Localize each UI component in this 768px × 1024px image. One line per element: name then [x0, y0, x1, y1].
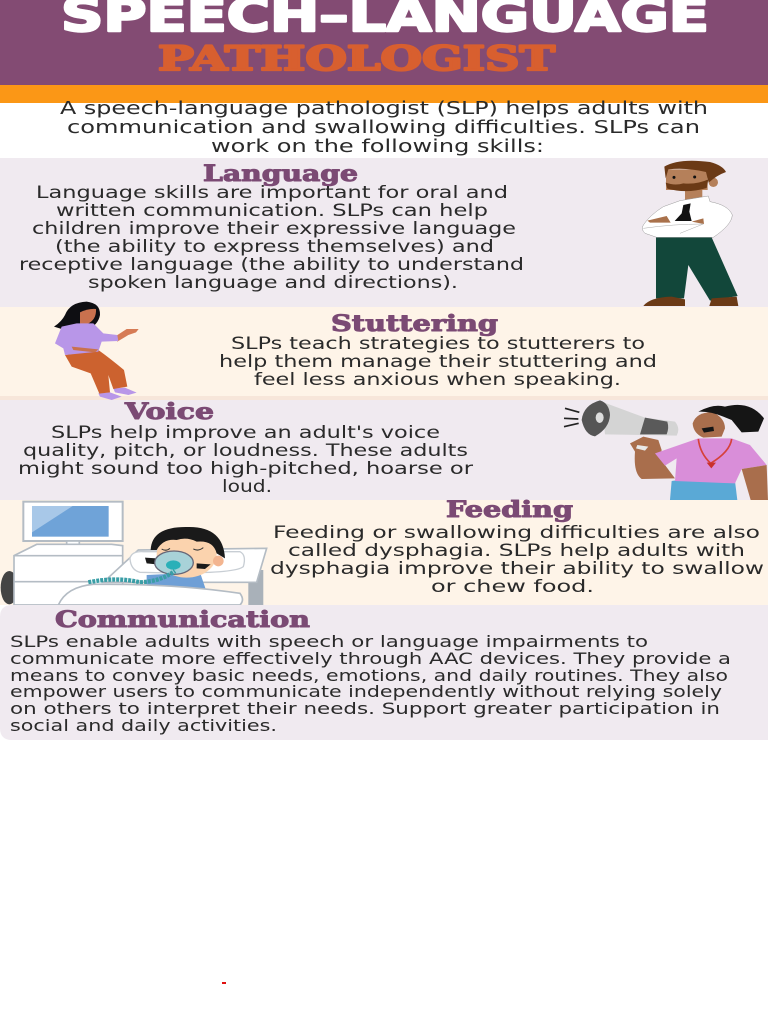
intro text: A speech-language pathologist (SLP) helps adults with: [60, 99, 708, 119]
voice body text: [18, 423, 473, 496]
panel: communication: [0, 605, 768, 740]
stuttering body text: [219, 334, 657, 389]
feeding body text: Feeding or swallowing difficulties are also: [273, 523, 760, 542]
heading: communication: Communication: [55, 607, 310, 633]
icon: seated woman: [54, 302, 139, 400]
communication body text: SLPs enable adults with speech or language impairments to: [10, 632, 648, 651]
feeding body text: dysphagia improve their ability to swallow: [270, 559, 764, 578]
panel: language: [0, 158, 768, 307]
language body text: spoken language and directions).: [88, 273, 458, 292]
red dash mark: [222, 982, 226, 984]
feeding body text: [270, 523, 764, 596]
communication body text: means to convey basic needs, emotions, and daily routines. They also: [10, 666, 728, 685]
language body text: [19, 183, 524, 292]
language body text: written communication. SLPs can help: [56, 201, 488, 220]
voice body text: loud.: [222, 477, 272, 496]
heading: feeding: Feeding: [446, 497, 573, 523]
icon: patient in hospital bed with oxygen mask: [1, 502, 267, 605]
heading: language: Language: [203, 161, 358, 187]
heading: voice: Voice: [124, 399, 214, 425]
language body text: Language skills are important for oral and: [36, 183, 508, 202]
heading: stuttering: Stuttering: [331, 311, 498, 337]
subtitle: PATHOLOGIST: [158, 39, 555, 79]
communication body text: empower users to communicate independently without relying solely: [10, 682, 722, 701]
communication body text: communicate more effectively through AAC devices. They provide a: [10, 649, 731, 668]
communication body text: on others to interpret their needs. Support greater participation in: [10, 699, 720, 718]
feeding body text: or chew food.: [431, 577, 594, 596]
stuttering body text: help them manage their stuttering and: [219, 352, 657, 371]
intro text: communication and swallowing difficulties. SLPs can: [67, 118, 700, 138]
panel: feeding: [0, 497, 768, 605]
voice body text: quality, pitch, or loudness. These adults: [23, 441, 468, 460]
intro text: work on the following skills:: [211, 137, 544, 157]
feeding body text: called dysphagia. SLPs help adults with: [288, 541, 745, 560]
stuttering body text: feel less anxious when speaking.: [254, 370, 621, 389]
voice body text: might sound too high-pitched, hoarse or: [18, 459, 473, 478]
language body text: (the ability to express themselves) and: [55, 237, 494, 256]
header banner: [0, 0, 768, 103]
language body text: receptive language (the ability to understand: [19, 255, 524, 274]
language body text: children improve their expressive language: [32, 219, 516, 238]
communication body text: social and daily activities.: [10, 716, 277, 735]
intro text: [60, 99, 708, 157]
icon: man with crossed arms: [642, 161, 738, 306]
voice body text: SLPs help improve an adult's voice: [51, 423, 440, 442]
panel: voice: [0, 399, 768, 500]
panel: stuttering: [0, 302, 768, 400]
stuttering body text: SLPs teach strategies to stutterers to: [231, 334, 645, 353]
icon: person with megaphone: [564, 400, 768, 500]
communication body text: [10, 632, 731, 735]
